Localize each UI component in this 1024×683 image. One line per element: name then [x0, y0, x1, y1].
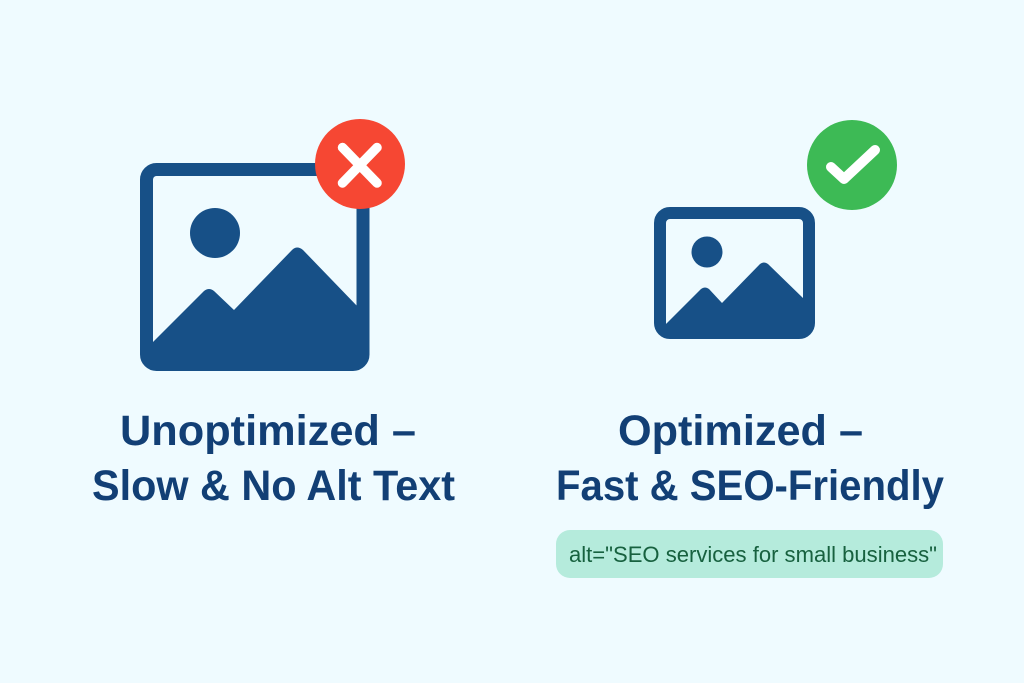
panel: optimized [556, 120, 944, 578]
icon: red cross badge [315, 119, 405, 209]
icon: green check badge [807, 120, 897, 210]
heading: unoptimized: Unoptimized – [120, 407, 416, 455]
icon: small image placeholder [660, 213, 809, 334]
callout: alt text pill [556, 530, 943, 578]
callout: alt text pill: alt="SEO services for small business" [569, 542, 937, 567]
icon: large image placeholder [146, 170, 363, 364]
panel: unoptimized [92, 119, 455, 510]
heading: optimized: Optimized – [618, 407, 863, 455]
heading: optimized: Fast & SEO-Friendly [556, 462, 944, 510]
heading: unoptimized: Slow & No Alt Text [92, 462, 455, 510]
